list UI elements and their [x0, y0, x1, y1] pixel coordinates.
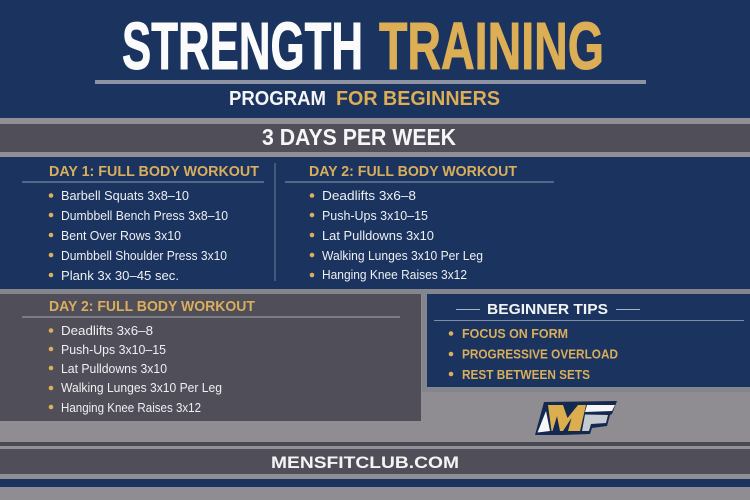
panel: day 2 workout repeat: DAY 2: FULL BODY WORKOUT [49, 298, 255, 315]
day 1 workout: Dumbbell Bench Press 3x8–10 [61, 208, 228, 223]
title: STRENGTH [122, 9, 363, 84]
day 2 workout [285, 163, 554, 282]
frequency label: 3 DAYS PER WEEK [262, 124, 456, 150]
day 1 workout: Barbell Squats 3x8–10 [61, 188, 189, 203]
day 1 workout: Plank 3x 30–45 sec. [61, 268, 179, 283]
day 1 workout: Dumbbell Shoulder Press 3x10 [61, 248, 227, 263]
day 2 workout: Push-Ups 3x10–15 [322, 208, 428, 223]
day 2 workout: Lat Pulldowns 3x10 [322, 228, 434, 243]
subtitle: PROGRAM [229, 88, 326, 110]
day 2 workout: DAY 2: FULL BODY WORKOUT [309, 163, 517, 180]
panel: day 2 workout repeat: Lat Pulldowns 3x10 [61, 361, 167, 376]
divider band [0, 289, 750, 294]
panel: day 2 workout repeat: Walking Lunges 3x10 Per Leg [61, 380, 222, 395]
website: MENSFITCLUB.COM [271, 453, 459, 472]
tips heading: BEGINNER TIPS [487, 301, 608, 318]
panel: day 2 workout repeat: Hanging Knee Raises 3x12 [61, 400, 201, 415]
title: TRAINING [379, 9, 604, 84]
panel: beginner tips: REST BETWEEN SETS [462, 367, 590, 382]
day 1 workout [22, 163, 264, 283]
panel: day 2 workout repeat: Deadlifts 3x6–8 [61, 323, 153, 338]
day 1 workout: DAY 1: FULL BODY WORKOUT [49, 163, 259, 180]
footer band [0, 442, 750, 487]
subtitle: FOR BEGINNERS [336, 88, 500, 110]
panel: day 2 workout repeat: Push-Ups 3x10–15 [61, 342, 166, 357]
subtitle [229, 88, 500, 110]
day 1 workout: Bent Over Rows 3x10 [61, 228, 181, 243]
panel: beginner tips: PROGRESSIVE OVERLOAD [462, 346, 618, 362]
panel: day 1 and day 2 workouts [0, 157, 750, 289]
day 2 workout: Deadlifts 3x6–8 [322, 188, 416, 203]
day 2 workout: Walking Lunges 3x10 Per Leg [322, 248, 483, 263]
day 2 workout: Hanging Knee Raises 3x12 [322, 267, 467, 282]
panel: beginner tips [422, 294, 750, 392]
panel: day 2 workout repeat [0, 294, 421, 421]
frequency band [0, 118, 750, 157]
panel: beginner tips: FOCUS ON FORM [462, 326, 568, 341]
icon: MF logo [535, 401, 617, 435]
header panel [0, 0, 750, 118]
